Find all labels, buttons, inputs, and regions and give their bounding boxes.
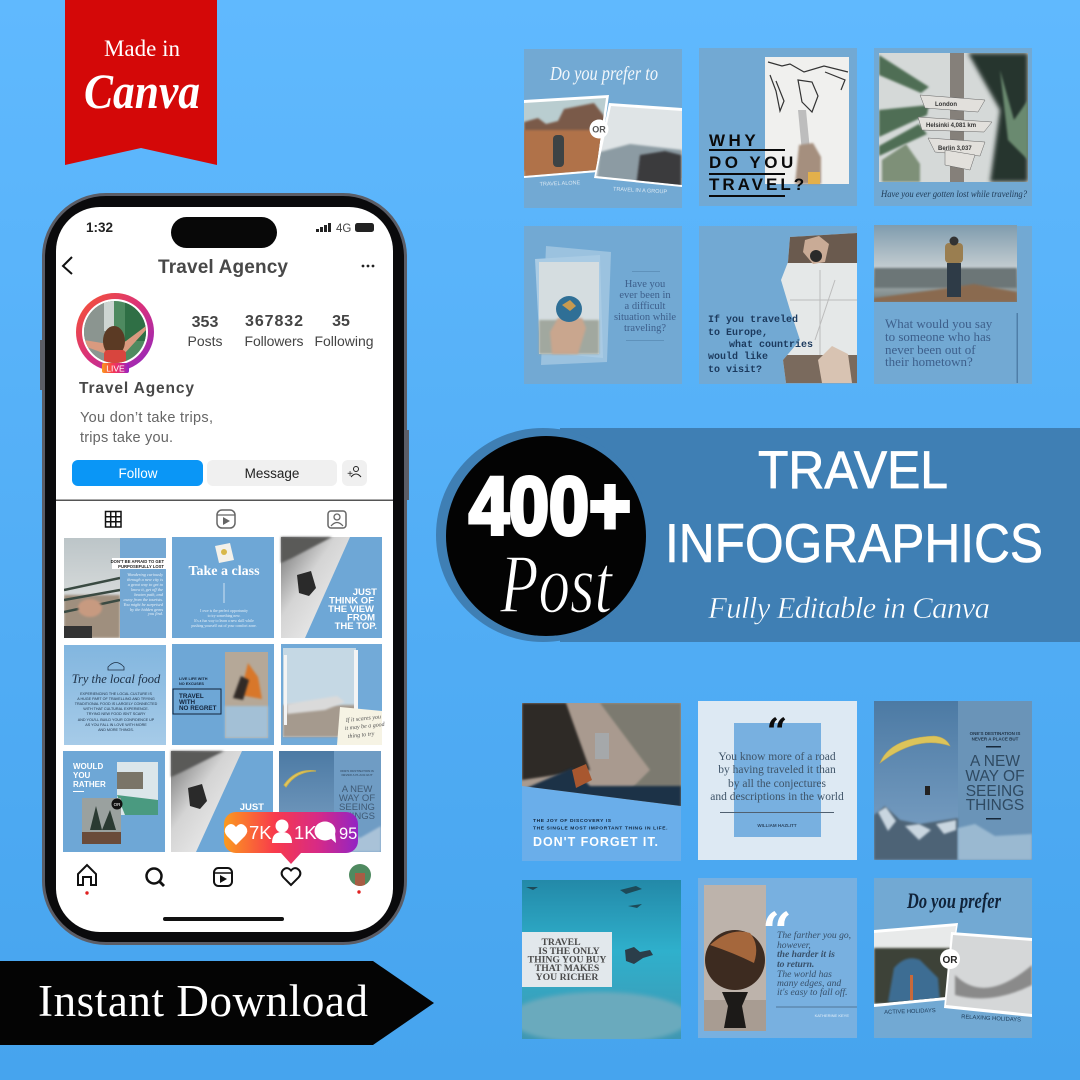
- phone grid post 2: It's a fun way to learn a new skill while: [194, 619, 254, 623]
- profile stats: 35: [332, 313, 350, 330]
- red ribbon: Made in Canva: [65, 0, 217, 165]
- top template: lost while traveling: London: [935, 102, 957, 108]
- 400+ post badge: Post: [499, 538, 614, 631]
- bottom template: Do you prefer: ACTIVE HOLIDAYS: [884, 1008, 936, 1016]
- bottom template: travel makes you richer: TRAVEL: [541, 937, 581, 948]
- phone grid post 8: [171, 751, 273, 852]
- phone grid post 4: AND MORE THINGS.: [98, 728, 134, 732]
- phone grid post 1: DON'T BE AFRAID TO GET: [111, 559, 164, 564]
- phone grid post 4: WITH THAT CULTURAL EXPERIENCE.: [83, 707, 149, 711]
- profile header: [63, 257, 374, 278]
- bottom template: globe quote: [698, 878, 857, 1038]
- top template: traveled to Europe: would like: [708, 351, 768, 363]
- bottom template: road quote: and descriptions in the world: [710, 791, 844, 803]
- phone grid post 1: by the hidden gems: [130, 607, 163, 612]
- bottom template: a new way of seeing things: THINGS: [966, 797, 1024, 814]
- profile buttons: +: [347, 469, 353, 480]
- profile name and bio: You don’t take trips,: [80, 410, 213, 426]
- bottom template: travel makes you richer: THING YOU BUY: [528, 954, 606, 966]
- bottom template: travel makes you richer: THAT MAKES: [535, 963, 599, 974]
- bottom template: a new way of seeing things: NEVER A PLACE BUT: [972, 736, 1019, 742]
- phone grid post 7: YOU: [73, 771, 91, 780]
- bottom template: globe quote: many edges, and: [777, 978, 841, 989]
- top template: hometown: to someone who has: [885, 329, 991, 344]
- phone grid post 1: away from the tourists.: [124, 597, 163, 602]
- top template: lost while traveling: Helsinki 4,081 km: [926, 123, 976, 129]
- bottom template: joy of discovery: THE SINGLE MOST IMPORTANT THING IN LIFE.: [533, 826, 668, 832]
- banner heading: [665, 441, 1043, 574]
- bottom template: globe quote: the harder it is: [777, 949, 835, 960]
- phone grid post 9: [279, 751, 381, 852]
- engagement notification bubble: 7K: [249, 822, 272, 843]
- phone grid post 5: LIVE LIFE WITH: [179, 677, 208, 681]
- top template: Do you prefer to: TRAVEL ALONE: [540, 180, 581, 188]
- bottom template: a new way of seeing things: A NEW: [970, 753, 1020, 770]
- avatar with live badge: LIVE: [106, 364, 125, 374]
- bottom template: road quote: by all the conjectures: [728, 778, 827, 790]
- top template: Why do you travel: [699, 48, 857, 206]
- phone grid post 9: ONE'S DESTINATION IS: [340, 769, 374, 773]
- 400+ post badge: 400+: [469, 461, 631, 552]
- banner heading: TRAVEL: [758, 441, 948, 500]
- bottom template: road quote: You know more of a road: [718, 751, 836, 763]
- engagement notification bubble: 95: [339, 825, 357, 843]
- profile stats: 353: [192, 314, 218, 331]
- phone grid post 7: OR: [114, 802, 121, 807]
- top template: lost while traveling: Berlin 3,037: [938, 146, 972, 152]
- top template: traveled to Europe: to visit?: [708, 364, 762, 376]
- phone grid post 1: [64, 538, 166, 638]
- bottom navigation: [78, 864, 371, 921]
- phone grid post 5: NO REGRET: [179, 705, 217, 712]
- phone grid post 2: to try something new.: [208, 614, 240, 618]
- phone grid post 8: JUST: [240, 802, 264, 813]
- top template: hometown: never been out of: [885, 342, 976, 357]
- phone grid post 6: it may be a good: [345, 722, 386, 732]
- top template: Do you prefer to: TRAVEL IN A GROUP: [613, 187, 668, 195]
- red ribbon: Made in Canva: Made in: [104, 36, 180, 61]
- phone grid post 9: SEEING: [339, 802, 375, 813]
- bottom template: globe quote: The farther you go,: [777, 930, 851, 941]
- phone grid post 7: [63, 751, 165, 852]
- phone grid post 1: beaten path, and: [134, 592, 164, 598]
- bottom template: Do you prefer: RELAXING HOLIDAYS: [961, 1014, 1021, 1024]
- bottom template: globe quote: The world has: [777, 969, 832, 980]
- red ribbon: Made in Canva: Canva: [84, 63, 200, 119]
- banner: [436, 428, 1080, 642]
- phone grid post 7: RATHER: [73, 780, 106, 789]
- phone grid post 9: NEVER A PLACE BUT: [341, 773, 373, 777]
- top template: Do you prefer to: [524, 49, 682, 208]
- top template: lost while traveling: [874, 48, 1032, 206]
- top template: difficult situation: a difficult: [625, 301, 666, 312]
- top template: hometown: What would you say: [885, 316, 993, 331]
- bottom template: globe quote: however,: [777, 940, 811, 951]
- phone grid post 1: you find.: [147, 611, 163, 616]
- phone grid post 4: Try the local food: [72, 672, 161, 686]
- bottom template: a new way of seeing things: SEEING: [966, 783, 1024, 800]
- profile stats: [187, 313, 374, 349]
- profile stats: Following: [314, 333, 374, 349]
- avatar with live badge: [76, 293, 154, 374]
- bottom template: Do you prefer: OR: [942, 955, 958, 966]
- phone grid post 5: [172, 644, 274, 745]
- phone grid post 1: a great way to get to: [128, 582, 164, 587]
- bottom template: globe quote: KATHERINE KEYE: [815, 1013, 849, 1018]
- top template: Do you prefer to: Do you prefer to: [549, 63, 658, 85]
- top template: difficult situation: [524, 226, 682, 384]
- profile stats: 367832: [245, 313, 303, 330]
- phone grid post 1: through a new city is: [127, 577, 163, 582]
- status bar: [86, 217, 374, 248]
- bottom template: joy of discovery: [522, 703, 681, 861]
- top template: difficult situation: ever been in: [619, 290, 671, 301]
- top template: Do you prefer to: OR: [592, 124, 606, 134]
- bottom template: globe quote: to return.: [777, 959, 814, 970]
- bottom template: a new way of seeing things: WAY OF: [965, 768, 1025, 785]
- bottom template: travel makes you richer: [522, 880, 681, 1039]
- phone body: [40, 193, 409, 945]
- phone grid post 4: TRYING NEW FOOD ISN'T SCARY: [87, 712, 146, 716]
- phone grid post 1: You might be surprised: [123, 602, 164, 607]
- phone grid post 3: [281, 537, 382, 638]
- phone grid post 4: AS YOU FALL IN LOVE WITH MORE: [85, 723, 147, 727]
- top template: traveled to Europe: to Europe,: [708, 328, 768, 339]
- top template: traveled to Europe: what countries: [729, 339, 813, 351]
- profile buttons: [72, 460, 367, 486]
- phone grid post 3: FROM: [347, 612, 375, 624]
- bottom template: road quote: WILLIAM HAZLITT: [757, 823, 797, 828]
- phone mockup: [40, 193, 409, 945]
- top template: lost while traveling: Have you ever gotten lost while traveling?: [880, 190, 1027, 200]
- engagement notification bubble: [224, 812, 358, 864]
- bottom template: globe quote: it's easy to fall off.: [777, 987, 848, 998]
- banner subtitle: Fully Editable in Canva: [707, 590, 990, 625]
- bottom template: road quote: by having traveled it than: [718, 764, 836, 776]
- phone grid post 6: If it scares you: [344, 713, 381, 724]
- top template: difficult situation: traveling?: [624, 323, 666, 334]
- phone grid post 2: pushing yourself out of your comfort zone.: [191, 624, 257, 628]
- profile name and bio: trips take you.: [80, 430, 173, 446]
- profile name and bio: [79, 380, 213, 446]
- phone grid post 9: THINGS: [339, 811, 375, 822]
- top template: hometown: their hometown?: [885, 354, 973, 369]
- phone grid post 5: TRAVEL: [179, 693, 204, 700]
- bottom template: a new way of seeing things: [874, 701, 1032, 860]
- top template: Why do you travel: DO YOU: [709, 153, 797, 172]
- profile stats: Posts: [187, 333, 223, 349]
- profile stats: Followers: [244, 333, 304, 349]
- phone grid post 6: [281, 644, 386, 745]
- phone grid post 3: THE TOP.: [335, 621, 377, 632]
- bottom template: globe quote: “: [762, 902, 792, 963]
- phone grid post 1: Wandering curiously: [127, 572, 163, 577]
- status bar: 1:32: [86, 220, 113, 235]
- phone grid post 1: PURPOSEFULLY LOST: [118, 564, 164, 569]
- top template: hometown: [874, 225, 1032, 384]
- top template: difficult situation: Have you: [625, 279, 666, 290]
- phone grid post 5: NO EXCUSES: [179, 682, 204, 686]
- top template: difficult situation: situation while: [614, 312, 676, 323]
- phone grid post 3: JUST: [353, 587, 377, 598]
- phone grid post 4: [64, 645, 166, 745]
- profile header: Travel Agency: [158, 257, 288, 278]
- bottom template: Do you prefer: [874, 878, 1032, 1038]
- phone grid post 3: THINK OF: [329, 596, 374, 606]
- engagement notification bubble: 1K: [294, 822, 317, 843]
- bottom template: Do you prefer: Do you prefer: [906, 888, 1001, 913]
- bottom template: joy of discovery: DON'T FORGET IT.: [533, 835, 658, 849]
- instant download arrow banner: [0, 961, 434, 1045]
- top template: traveled to Europe: [699, 226, 857, 384]
- phone grid post 9: WAY OF: [339, 793, 375, 804]
- bottom template: travel makes you richer: IS THE ONLY: [538, 946, 600, 957]
- bottom template: travel makes you richer: YOU RICHER: [536, 972, 599, 983]
- profile tabs: [106, 510, 346, 528]
- phone grid post 6: thing to try: [348, 731, 375, 740]
- bottom template: road quote: [698, 701, 857, 860]
- instant download arrow banner: Instant Download: [38, 976, 368, 1026]
- banner circle backing: [436, 428, 650, 642]
- phone grid post 4: A HUGE PART OF TRAVELLING AND TRYING: [77, 697, 155, 701]
- phone grid post 1: know it, get off the: [131, 587, 163, 593]
- status bar: 4G: [336, 223, 351, 235]
- profile buttons: Follow: [118, 466, 158, 481]
- bottom template: a new way of seeing things: ONE'S DESTINATION IS: [970, 731, 1020, 736]
- top template: Why do you travel: TRAVEL?: [709, 175, 807, 194]
- bottom template: joy of discovery: THE JOY OF DISCOVERY IS: [533, 818, 612, 824]
- phone grid post 5: WITH: [179, 699, 196, 706]
- profile name and bio: Travel Agency: [79, 380, 194, 397]
- phone grid post 2: [172, 537, 274, 638]
- phone grid post 3: THE VIEW: [328, 604, 374, 615]
- top template: Why do you travel: WHY: [709, 131, 759, 150]
- phone grid post 9: A NEW: [342, 784, 372, 795]
- banner heading: INFOGRAPHICS: [665, 512, 1043, 574]
- banner strip: [560, 428, 1080, 642]
- top template: traveled to Europe: If you traveled: [708, 314, 798, 326]
- bottom template: road quote: “: [767, 711, 787, 753]
- phone grid post 4: EXPERIENCING THE LOCAL CULTURE IS: [80, 692, 152, 696]
- profile buttons: Message: [245, 466, 299, 481]
- phone grid post 4: AND YOU'LL BUILD YOUR CONFIDENCE UP: [78, 718, 155, 722]
- phone grid post 7: WOULD: [73, 762, 103, 771]
- phone grid post 2: I owe is the perfect opportunity: [200, 609, 248, 613]
- 400+ post badge: [446, 436, 646, 636]
- phone grid post 4: TRADITIONAL FOOD IS LARGELY CONNECTED: [75, 702, 158, 706]
- phone grid post 2: Take a class: [188, 564, 260, 579]
